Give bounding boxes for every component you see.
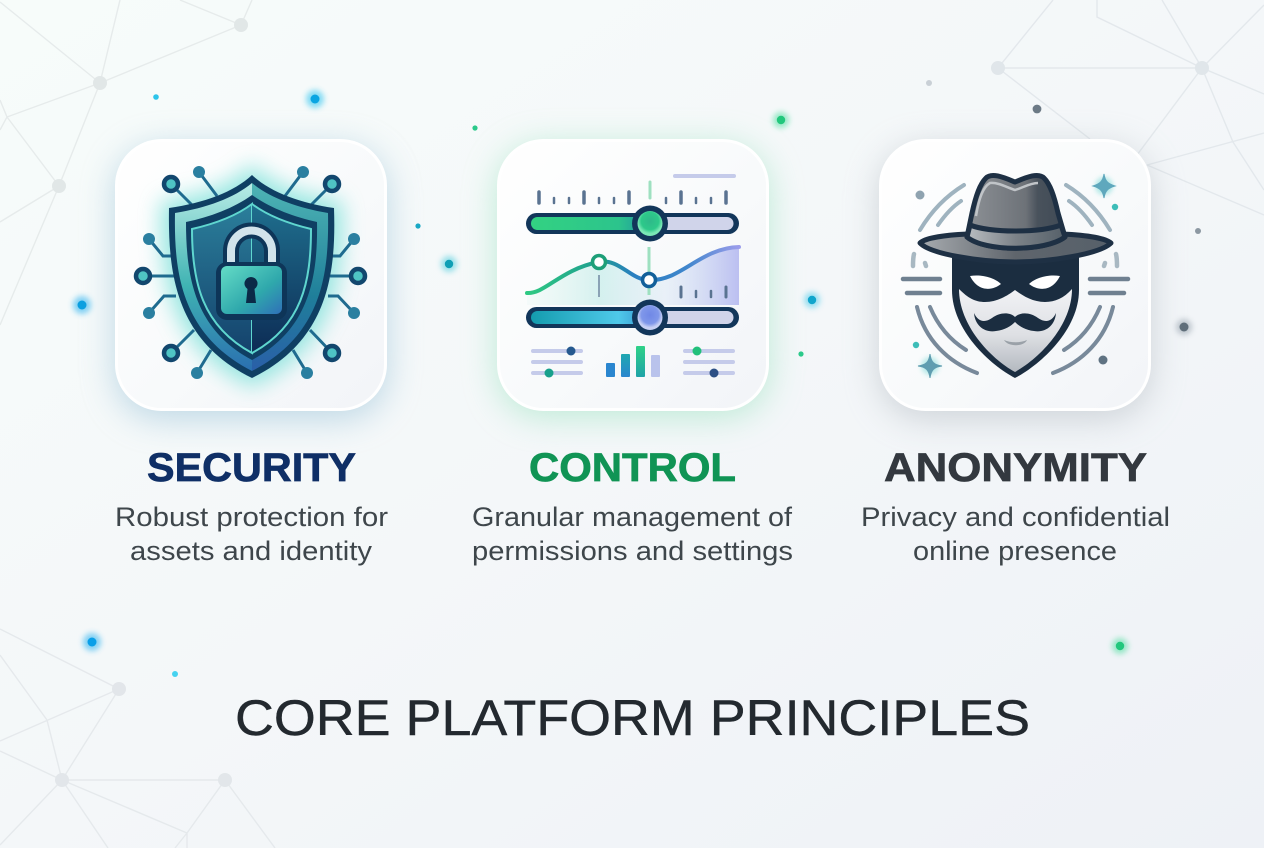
- icon: sliders and chart dashboard: [526, 176, 739, 378]
- description: anonymity: [861, 502, 1170, 566]
- description: security: Robust protection for: [115, 502, 388, 532]
- panel: security: [115, 140, 388, 566]
- description: security: [115, 502, 388, 566]
- card: control: [497, 140, 769, 417]
- icon: padlock: [216, 230, 287, 320]
- title: CORE PLATFORM PRINCIPLES: [235, 690, 1030, 746]
- mini bar chart: [606, 346, 660, 377]
- glowing particles: [73, 80, 1201, 677]
- sparkle: lower left: [918, 354, 942, 378]
- mini settings: left: [533, 346, 581, 378]
- line chart: [527, 247, 739, 305]
- description: control: Granular management of: [472, 502, 793, 532]
- panel: control: [472, 140, 793, 566]
- network: top right: [991, 0, 1264, 215]
- network: top left: [0, 0, 252, 325]
- description: anonymity: online presence: [913, 536, 1117, 566]
- slider: bottom: [526, 300, 739, 336]
- sparkle: upper right: [1093, 174, 1115, 198]
- heading: anonymity: ANONYMITY: [884, 446, 1147, 490]
- slider: top: [526, 206, 739, 242]
- heading: security: SECURITY: [147, 446, 356, 490]
- description: control: [472, 502, 793, 566]
- description: security: assets and identity: [130, 536, 373, 566]
- face mask: [952, 256, 1079, 378]
- fedora hat: [920, 175, 1111, 262]
- card: anonymity: [879, 140, 1151, 419]
- icon: shield with padlock and circuit nodes: [136, 166, 365, 379]
- card: security: [115, 140, 387, 419]
- description: anonymity: Privacy and confidential: [861, 502, 1170, 532]
- heading: control: CONTROL: [529, 446, 736, 490]
- mini settings: right: [685, 346, 733, 378]
- panel: anonymity: [861, 140, 1170, 566]
- description: control: permissions and settings: [472, 536, 793, 566]
- network: bottom left: [0, 629, 275, 848]
- icon: masked figure in hat: [903, 174, 1128, 378]
